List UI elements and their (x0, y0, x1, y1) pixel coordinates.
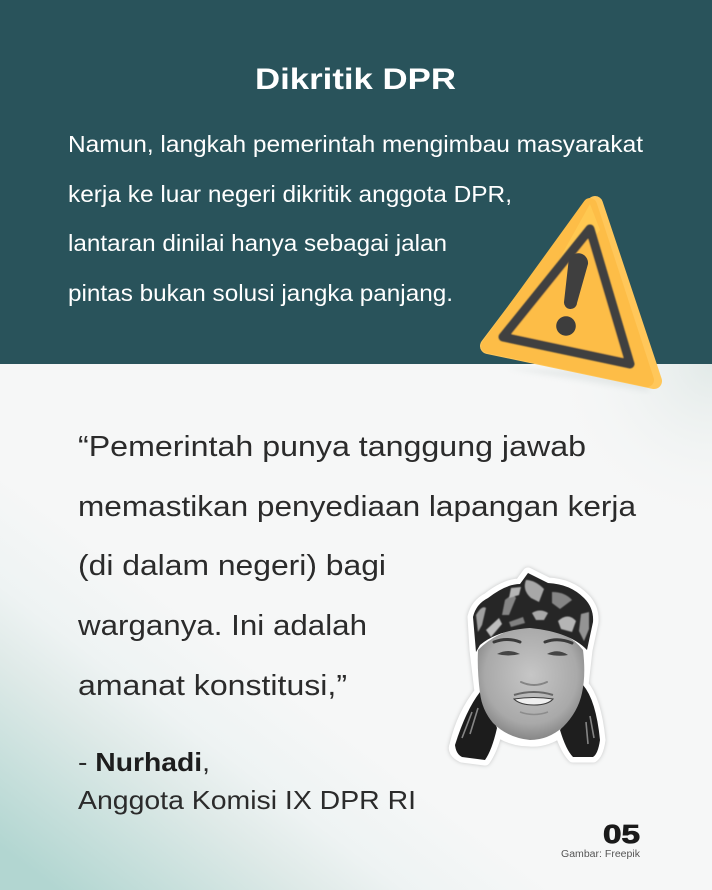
page number: 05 (603, 819, 640, 849)
sticker outline (454, 573, 600, 760)
text block: quote: warganya. Ini adalah (77, 610, 367, 642)
text block: intro paragraph: lantaran dinilai hanya sebagai jalan (68, 230, 447, 256)
image credit: Gambar: Freepik (561, 849, 641, 860)
face (478, 628, 584, 740)
nose (521, 682, 547, 685)
panel: teal header (0, 0, 712, 364)
moustache (514, 692, 553, 695)
text block: quote (77, 431, 637, 702)
text block: attribution: - Nurhadi , (78, 747, 210, 777)
portrait: Nurhadi sticker (454, 573, 600, 760)
eyebrows (494, 640, 572, 643)
left hair (455, 692, 497, 760)
icon: warning triangle (488, 204, 654, 392)
page background (0, 364, 712, 890)
bandana (473, 573, 593, 652)
right hair (560, 685, 600, 757)
text block: quote: memastikan penyediaan lapangan kerja (78, 491, 637, 523)
mouth (514, 698, 553, 705)
text block: intro paragraph: kerja ke luar negeri dikritik anggota DPR, (68, 181, 512, 207)
eyes (497, 651, 568, 656)
text block: attribution (78, 747, 416, 815)
hair highlights (462, 708, 594, 744)
text block: intro paragraph: Namun, langkah pemerintah mengimbau masyarakat (68, 131, 644, 157)
text block: quote: “Pemerintah punya tanggung jawab (78, 431, 586, 463)
title: Dikritik DPR (255, 63, 456, 96)
text block: intro paragraph (68, 131, 644, 306)
chin shade (520, 712, 548, 714)
text block: quote: (di dalam negeri) bagi (78, 550, 386, 582)
text block: attribution: Anggota Komisi IX DPR RI (78, 785, 416, 815)
bandana pattern (476, 580, 589, 641)
text block: intro paragraph: pintas bukan solusi jangka panjang. (68, 280, 453, 306)
text block: quote: amanat konstitusi,” (78, 670, 347, 702)
